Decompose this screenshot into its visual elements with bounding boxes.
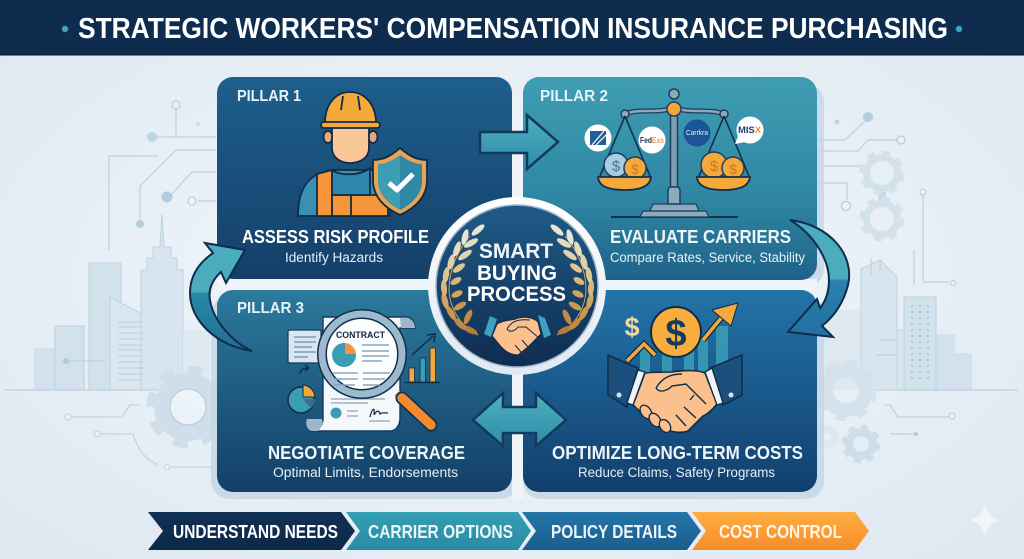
panel: pillar 2 evaluate carriers: EVALUATE CARRIERS — [610, 227, 791, 247]
icon: handshake with dollar coin and growth arrow — [608, 303, 742, 435]
arrow: double arrow between pillar 3 and pillar 4 — [473, 393, 566, 446]
panel: pillar 1 assess risk profile — [217, 77, 512, 279]
panel shadows — [211, 84, 824, 499]
arrow: pillar 1 to pillar 2 — [480, 115, 558, 169]
chevron: understand needs: UNDERSTAND NEEDS — [173, 521, 338, 542]
panel gaps — [217, 279, 817, 499]
arrow: curved pillar 3 to pillar 1 — [190, 243, 252, 351]
panel: pillar 1 assess risk profile: Identify Hazards — [285, 250, 383, 265]
icon: balance scale with carrier logos: $ — [729, 161, 737, 177]
icon: handshake with dollar coin and growth arrow: $ — [665, 313, 687, 355]
icon: balance scale with carrier logos: $ — [710, 158, 719, 175]
icon: balance scale with carrier logos: FedExs — [640, 136, 664, 145]
chevron: policy details: POLICY DETAILS — [551, 521, 677, 542]
icon: balance scale with carrier logos: $ — [612, 158, 621, 175]
laurel left — [440, 223, 486, 336]
panel: pillar 1 assess risk profile: ASSESS RISK PROFILE — [242, 227, 429, 247]
badge text: PROCESS — [467, 283, 566, 306]
panel: pillar 2 evaluate carriers — [523, 77, 817, 280]
panel: pillar 4 optimize long-term costs: OPTIMIZE LONG-TERM COSTS — [552, 443, 803, 463]
left background city and circuits — [5, 101, 224, 470]
panel: pillar 3 negotiate coverage: Optimal Limits, Endorsements — [273, 465, 458, 480]
chevron: carrier options — [346, 512, 531, 550]
icon: balance scale with carrier logos — [584, 89, 764, 217]
title: STRATEGIC WORKERS' COMPENSATION INSURANCE PURCHASING — [78, 13, 948, 45]
icon: construction worker with shield — [298, 92, 427, 216]
panel: pillar 3 negotiate coverage: PILLAR 3 — [237, 300, 304, 317]
chevron: carrier options: CARRIER OPTIONS — [368, 521, 513, 542]
icon: contract under magnifying glass: CONTRACT — [336, 330, 385, 341]
icon: balance scale with carrier logos: Carrkra — [686, 130, 708, 137]
panel: pillar 4 optimize long-term costs: Reduce Claims, Safety Programs — [578, 465, 775, 480]
center badge: smart buying process — [428, 197, 606, 375]
panel: pillar 4 optimize long-term costs — [523, 290, 817, 492]
laurel right — [549, 223, 595, 336]
header bar — [0, 0, 1024, 56]
icon: balance scale with carrier logos: $ — [631, 161, 639, 177]
right background city, gears and circuits — [817, 112, 1018, 461]
process chevrons — [148, 512, 869, 550]
chevron: understand needs — [148, 512, 355, 550]
chevron: policy details — [522, 512, 701, 550]
chevron: cost control — [692, 512, 869, 550]
badge text: BUYING — [477, 262, 557, 285]
panel: pillar 3 negotiate coverage: NEGOTIATE COVERAGE — [268, 443, 465, 463]
panel: pillar 2 evaluate carriers: PILLAR 2 — [540, 88, 608, 105]
icon: balance scale with carrier logos: MISX — [738, 125, 761, 135]
arrow: curved pillar 2 to pillar 4 — [788, 220, 849, 337]
icon: contract under magnifying glass — [288, 314, 440, 431]
badge text: SMART — [479, 240, 553, 263]
icon: badge handshake — [484, 315, 551, 355]
chevron: cost control: COST CONTROL — [719, 521, 842, 542]
panel: pillar 1 assess risk profile: PILLAR 1 — [237, 88, 301, 105]
icon: handshake with dollar coin and growth arrow: $ — [624, 312, 640, 342]
icon: sparkle — [970, 503, 1000, 537]
panel: pillar 3 negotiate coverage — [217, 290, 512, 492]
panel: pillar 2 evaluate carriers: Compare Rates, Service, Stability — [610, 250, 805, 265]
badge text — [467, 240, 566, 306]
